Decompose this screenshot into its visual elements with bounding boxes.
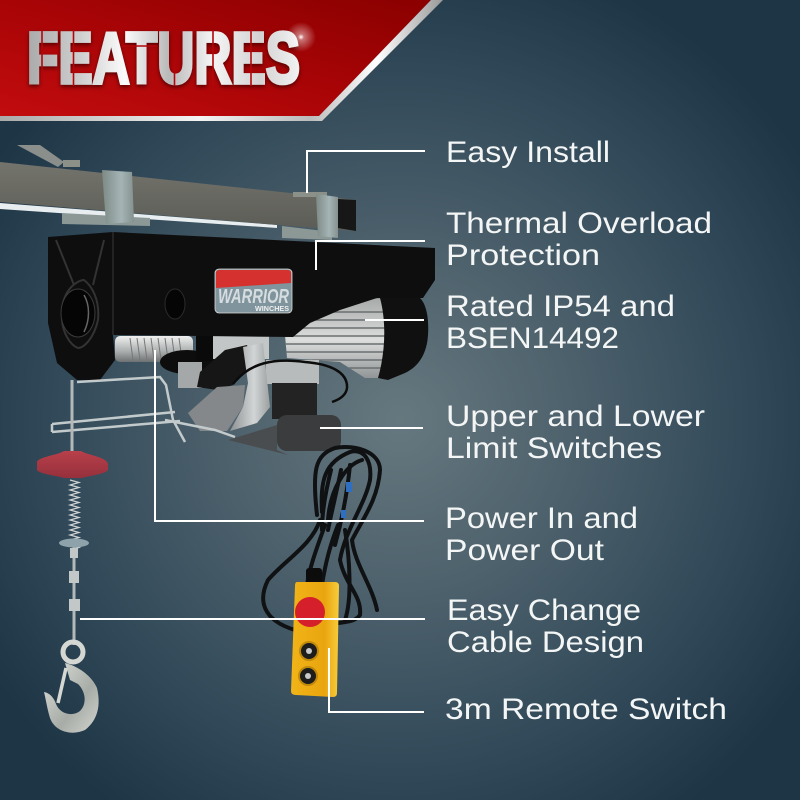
label: easy change cable — [447, 594, 644, 659]
line: remote switch — [329, 648, 424, 712]
label: remote switch: 3m Remote Switch — [445, 693, 727, 726]
label: easy change cable: Easy Change — [447, 594, 641, 627]
hook ring — [63, 642, 83, 662]
label: rated ip54: Rated IP54 and — [446, 290, 675, 323]
clamp right — [316, 194, 338, 238]
motor — [285, 298, 384, 378]
title glare — [286, 22, 316, 52]
beam highlight — [0, 203, 277, 228]
leader lines — [80, 151, 425, 712]
hoist product — [0, 145, 435, 733]
label: rated ip54 — [446, 290, 675, 355]
title stencil cuts — [42, 30, 251, 86]
drum gear — [160, 350, 214, 374]
remote cables — [263, 447, 380, 630]
logo red sky — [216, 270, 291, 288]
cable drum — [115, 336, 193, 362]
line: thermal overload — [316, 241, 425, 270]
label: limit switches: Upper and Lower — [446, 400, 705, 433]
top bolts — [63, 160, 327, 197]
clamp left — [102, 170, 134, 224]
rope sleeves — [69, 548, 80, 611]
beam — [0, 162, 356, 231]
title: FEATURES — [27, 19, 300, 99]
banner silver edge — [0, 0, 443, 121]
power cord — [233, 361, 347, 402]
up arrow — [306, 648, 312, 654]
blue connectors — [341, 482, 352, 518]
gearbox side block — [178, 362, 202, 388]
logo subtitle: WINCHES — [255, 304, 289, 313]
label: power in and out: Power In and — [445, 502, 638, 535]
down arrow — [305, 673, 311, 679]
motor end cap — [378, 298, 428, 380]
line: limit switches — [320, 427, 423, 429]
remote pendant — [291, 582, 339, 697]
label: thermal overload protection — [446, 207, 712, 272]
beam end face — [338, 199, 356, 231]
motor mount block — [266, 360, 319, 384]
black switch box — [272, 383, 317, 419]
limit switch capsule — [277, 415, 341, 451]
label: thermal overload protection: Protection — [446, 239, 600, 272]
spring — [70, 480, 79, 550]
pulley — [61, 289, 95, 337]
line: change cable — [80, 618, 425, 620]
hook rod — [72, 380, 74, 645]
mounting plates — [62, 213, 332, 240]
hook — [44, 663, 99, 733]
cable gland — [306, 568, 322, 583]
warrior logo — [215, 269, 292, 313]
label: thermal overload protection: Thermal Overload — [446, 207, 712, 240]
label: easy change cable: Cable Design — [447, 626, 644, 659]
stop button — [295, 597, 325, 627]
line: easy install — [307, 151, 425, 193]
hook latch — [58, 668, 66, 703]
gearbox top block — [213, 335, 269, 359]
body hole — [165, 289, 185, 319]
label: power in and out: Power Out — [445, 534, 605, 567]
gear inner casing — [188, 385, 245, 431]
gearbox dark recess — [197, 345, 253, 390]
hoist body — [48, 232, 435, 380]
label: limit switches — [446, 400, 705, 465]
gear cover — [230, 343, 270, 431]
banner red panel — [0, 0, 431, 116]
line: rated ip54 — [365, 319, 424, 321]
body end plate edge — [112, 232, 114, 335]
hanger strap — [17, 145, 64, 167]
washer — [59, 538, 89, 548]
line: power in and out — [155, 350, 424, 521]
control wedge — [228, 425, 288, 455]
label: power in and out — [445, 502, 638, 567]
down button — [299, 667, 317, 685]
label: easy install: Easy Install — [446, 136, 610, 169]
logo wordmark: WARRIOR — [218, 286, 289, 308]
label: limit switches: Limit Switches — [446, 432, 662, 465]
limit rods — [52, 377, 235, 442]
up button — [300, 642, 318, 660]
pulley gloss — [84, 295, 88, 332]
gear hub — [196, 335, 216, 361]
label: rated ip54: BSEN14492 — [446, 322, 619, 355]
pendant body — [291, 582, 339, 697]
red buffer stop — [37, 451, 108, 478]
header banner — [0, 0, 443, 121]
drum wire turns — [130, 338, 182, 360]
pulley recess — [56, 240, 104, 348]
